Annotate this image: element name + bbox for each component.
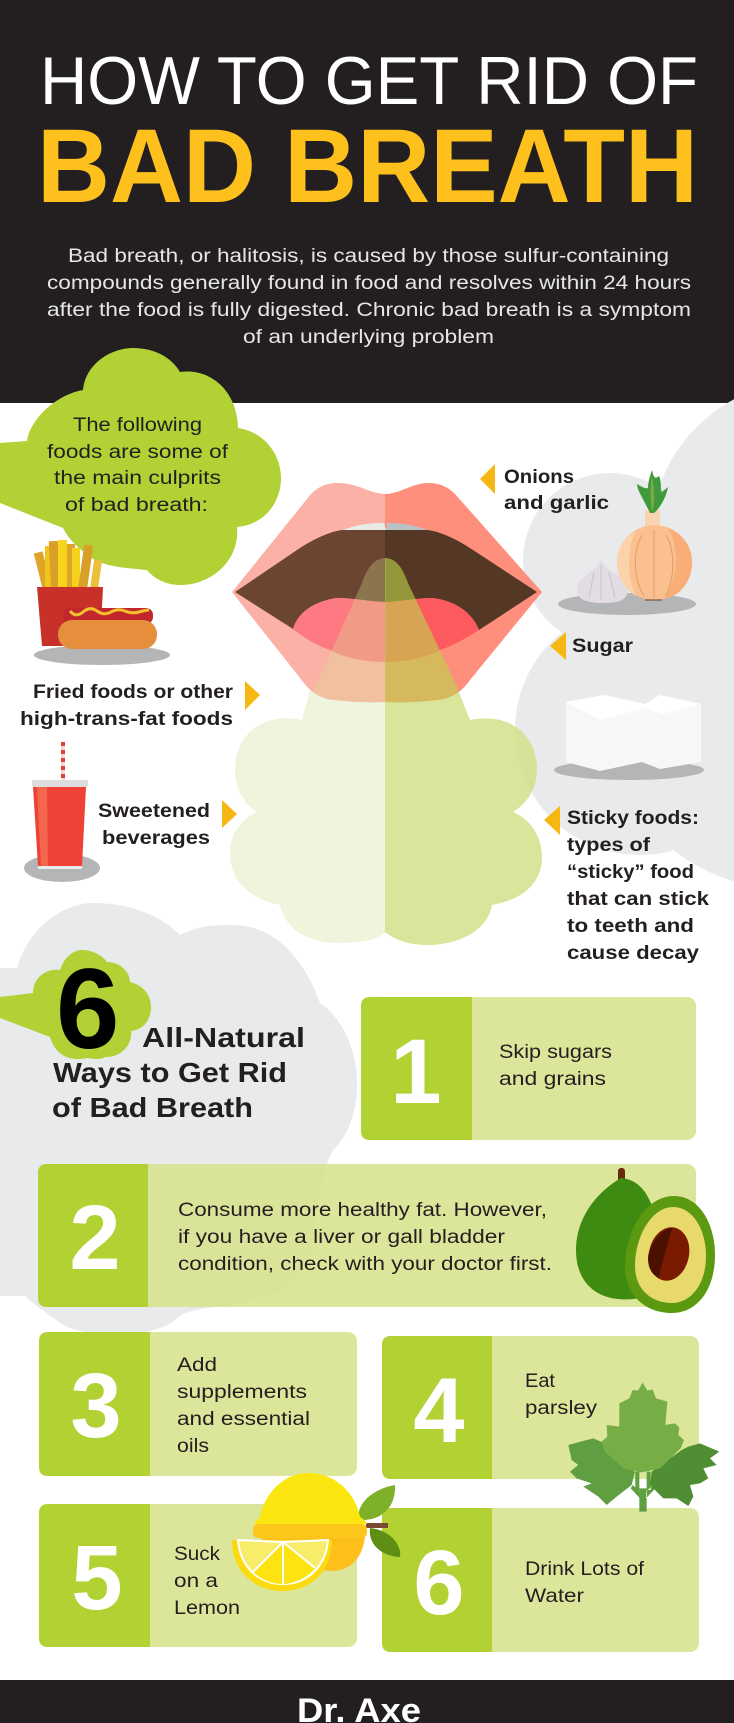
- title: [37, 43, 698, 225]
- card 3: supplements: [177, 1382, 307, 1403]
- teeth: [343, 523, 427, 530]
- card 1: and grains: [499, 1069, 606, 1090]
- card 6: Drink Lots of: [525, 1559, 645, 1580]
- card 6: [382, 1508, 699, 1652]
- breath cloud: [230, 690, 542, 945]
- label: onions and garlic: Onions: [504, 467, 574, 488]
- green number cloud: [0, 950, 151, 1059]
- grey background cloud left: [0, 903, 357, 1335]
- card 1: [361, 997, 696, 1140]
- card 3: 3: [70, 1355, 122, 1457]
- header band: [0, 0, 734, 403]
- section heading: All-Natural: [142, 1022, 305, 1053]
- card 2: 2: [69, 1187, 121, 1289]
- label: sticky foods: Sticky foods:: [567, 808, 699, 829]
- left lip: [232, 483, 386, 702]
- card 3: and essential: [177, 1409, 310, 1430]
- right lip: [385, 483, 542, 702]
- label: sweetened beverages: [98, 801, 210, 849]
- card 5: on a: [174, 1571, 219, 1592]
- card 4: 4: [413, 1360, 465, 1462]
- icon: avocado: [576, 1168, 715, 1313]
- intro paragraph: [47, 246, 691, 348]
- label: sticky foods: [567, 808, 709, 964]
- title: HOW TO GET RID OF: [40, 43, 698, 119]
- label: fried foods: [20, 682, 234, 730]
- icon: lemon: [232, 1473, 400, 1591]
- card 5: [39, 1504, 357, 1647]
- arrow: sugar: [550, 632, 566, 660]
- mouth: [232, 483, 542, 702]
- card 1: 1: [390, 1021, 442, 1123]
- speech cloud text: the main culprits: [54, 468, 221, 489]
- intro paragraph: Bad breath, or halitosis, is caused by those sulfur-containing: [68, 246, 669, 267]
- card 4: parsley: [525, 1398, 598, 1419]
- card 3: Add: [177, 1355, 217, 1376]
- card 3: oils: [177, 1436, 209, 1457]
- intro paragraph: compounds generally found in food and resolves within 24 hours: [47, 273, 691, 294]
- title: BAD BREATH: [37, 108, 698, 225]
- arrow: onions: [480, 464, 495, 494]
- card 6: 6: [413, 1532, 465, 1634]
- label: sweetened beverages: Sweetened: [98, 801, 210, 822]
- icon: sugar cubes: [554, 695, 704, 780]
- icon: fries and hot dog: [34, 540, 170, 665]
- intro paragraph: of an underlying problem: [243, 327, 494, 348]
- card 2: if you have a liver or gall bladder: [178, 1227, 506, 1248]
- card 2: [38, 1164, 696, 1307]
- green speech cloud: [0, 348, 281, 585]
- section heading: [52, 1022, 305, 1123]
- big number 6: 6: [56, 946, 119, 1073]
- card 2: condition, check with your doctor first.: [178, 1254, 552, 1275]
- speech cloud text: The following: [73, 415, 202, 436]
- label: sticky foods: that can stick: [567, 889, 709, 910]
- label: onions and garlic: [504, 467, 610, 514]
- intro paragraph: after the food is fully digested. Chronic bad breath is a symptom: [47, 300, 691, 321]
- label: fried foods: Fried foods or other: [33, 682, 234, 703]
- speech cloud text: [47, 415, 229, 516]
- icon: parsley: [568, 1383, 719, 1512]
- breath cone overlay: [313, 558, 459, 702]
- left mouth interior: [235, 530, 386, 629]
- right mouth interior: [385, 530, 537, 630]
- label: sticky foods: cause decay: [567, 943, 699, 964]
- arrow: fried foods: [245, 681, 260, 710]
- card 4: Eat: [525, 1371, 556, 1392]
- label: sweetened beverages: beverages: [102, 828, 210, 849]
- label: sticky foods: “sticky” food: [567, 862, 694, 883]
- tongue: [293, 598, 479, 662]
- arrow: sticky foods: [544, 806, 560, 835]
- footer band: [0, 1680, 734, 1723]
- card 5: 5: [71, 1527, 123, 1629]
- card 5: Lemon: [174, 1598, 240, 1619]
- icon: onion and garlic: [558, 470, 696, 615]
- speech cloud text: of bad breath:: [65, 495, 208, 516]
- section heading: of Bad Breath: [52, 1092, 253, 1123]
- fries: [34, 540, 102, 590]
- icon: drink cup: [24, 742, 100, 882]
- label: sugar: Sugar: [572, 636, 634, 657]
- card 3: [39, 1332, 357, 1476]
- card 5: Suck: [174, 1544, 221, 1565]
- card 4: [382, 1336, 699, 1479]
- speech cloud text: foods are some of: [47, 442, 229, 463]
- grey background cloud right: [515, 380, 734, 890]
- section heading: Ways to Get Rid: [53, 1057, 287, 1088]
- label: sticky foods: to teeth and: [567, 916, 694, 937]
- card 1: Skip sugars: [499, 1042, 612, 1063]
- label: onions and garlic: and garlic: [504, 493, 610, 514]
- arrow: sweetened beverages: [222, 800, 237, 828]
- card 2: Consume more healthy fat. However,: [178, 1200, 547, 1221]
- label: fried foods: high-trans-fat foods: [20, 709, 233, 730]
- label: sticky foods: types of: [567, 835, 651, 856]
- card 6: Water: [525, 1586, 585, 1607]
